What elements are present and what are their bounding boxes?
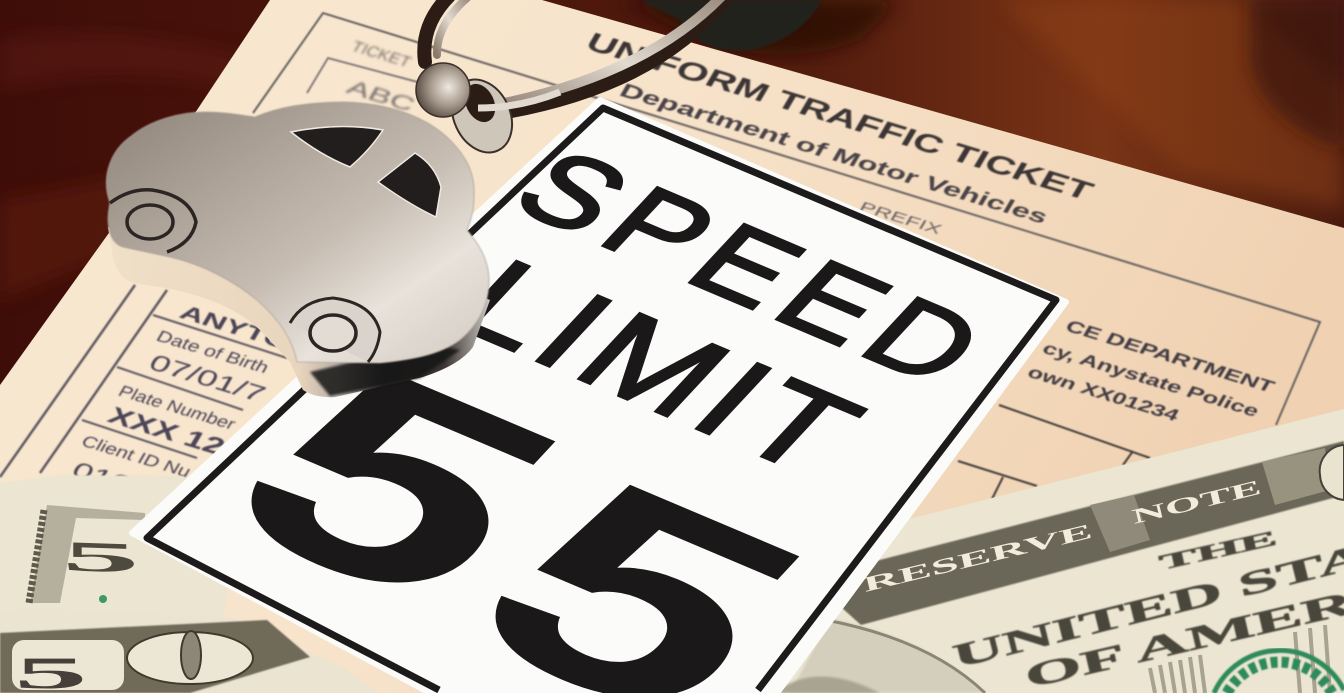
the united states of america lettering: UNITED STATES xyxy=(949,506,1344,676)
police department details: own XX01234 xyxy=(1024,362,1183,425)
lower bill engraved band xyxy=(0,620,310,693)
police department details: cy, Anystate Police xyxy=(1039,338,1263,421)
ticket heading: uniform traffic ticket: UNIFORM TRAFFIC TICKET xyxy=(581,27,1099,206)
driver details fields xyxy=(67,302,294,502)
upper bill engraving: 5 xyxy=(62,532,139,582)
green treasury seal xyxy=(1214,650,1344,693)
police department details: CE DEPARTMENT xyxy=(1062,316,1279,396)
prefix label: PREFIX xyxy=(856,200,944,238)
right dollar bill xyxy=(760,409,1344,693)
driver details fields: Date of Birth xyxy=(153,327,272,377)
rear wheel xyxy=(110,190,196,252)
driver details fields: ANYTO xyxy=(175,302,294,354)
portrait oval xyxy=(790,618,985,693)
key ring bead and collar xyxy=(416,63,560,162)
police department details xyxy=(1024,316,1279,425)
driver details fields: Client ID Nu xyxy=(78,432,195,481)
key ring xyxy=(424,0,725,116)
ticket form lines xyxy=(0,13,1320,499)
the united states of america lettering: THE xyxy=(1157,525,1279,575)
department subheading: Department of Motor Vehicles xyxy=(615,80,1052,228)
silver car keychain xyxy=(106,63,560,397)
vertical engraving xyxy=(1150,625,1330,693)
left dollar bills xyxy=(0,475,377,693)
speed numeral first five: 5 xyxy=(162,307,630,660)
car windows xyxy=(291,126,441,217)
fifty numeral xyxy=(12,631,253,693)
speed limit sign xyxy=(132,100,1066,693)
driver details fields: 0123 xyxy=(67,457,155,502)
car body top xyxy=(106,102,489,363)
upper bill xyxy=(0,475,240,640)
ticket number labels: ABC xyxy=(342,77,419,116)
the united states of america lettering xyxy=(949,506,1344,693)
engraved band xyxy=(841,441,1344,625)
white sign plate xyxy=(132,100,1066,693)
ticket number labels: TICKET xyxy=(348,39,414,71)
driver details fields: 07/01/7 xyxy=(144,350,270,407)
black key fob xyxy=(640,0,822,51)
black sign border xyxy=(147,108,1056,690)
car side wall xyxy=(108,227,490,397)
driver details fields: Plate Number xyxy=(115,382,240,433)
reserve note text: RESERVE xyxy=(861,519,1095,597)
lower bill xyxy=(0,608,377,693)
car keychain shadow xyxy=(310,345,460,396)
speed heading: SPEED xyxy=(490,128,1009,406)
driver details fields: XXX 12 xyxy=(103,403,229,460)
limit heading: LIMIT xyxy=(426,236,889,496)
upper bill engraving xyxy=(29,505,145,603)
bill paper xyxy=(760,409,1344,693)
front wheel xyxy=(290,298,380,362)
ticket number labels xyxy=(342,39,419,116)
note text: NOTE xyxy=(1130,475,1264,529)
